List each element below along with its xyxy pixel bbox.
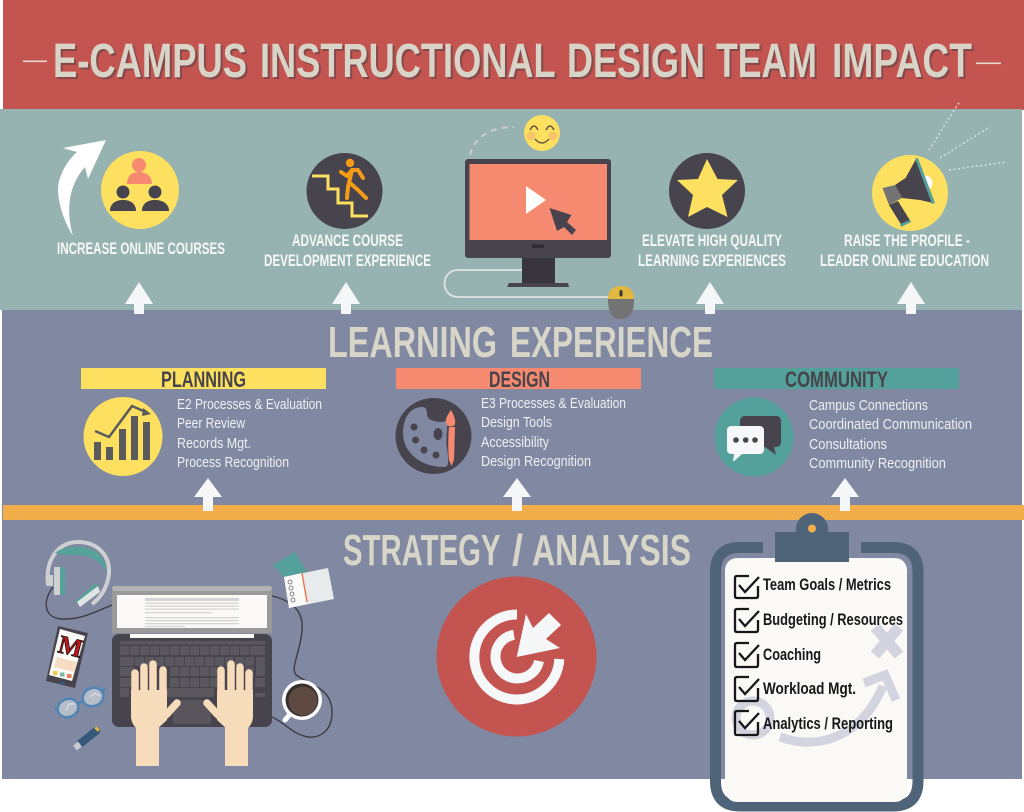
checkbox icons <box>735 576 759 735</box>
list: design items: Accessibility <box>481 434 549 451</box>
checklist text: Coaching <box>763 645 821 664</box>
list: design items: Design Recognition <box>481 453 591 470</box>
panel: community <box>714 367 972 476</box>
panel: design: DESIGN <box>489 367 550 392</box>
list: community items: Consultations <box>809 436 887 453</box>
list: planning items <box>177 396 322 471</box>
list: planning items: E2 Processes & Evaluation <box>177 396 322 413</box>
label: increase online courses: INCREASE ONLINE COURSES <box>57 240 225 258</box>
list: community items: Community Recognition <box>809 455 946 472</box>
clip <box>775 513 849 562</box>
panel: impact outcomes <box>0 109 1022 310</box>
list: planning items: Peer Review <box>177 415 245 432</box>
heading: strategy / analysis: ANALYSIS <box>532 526 691 575</box>
panel: community: COMMUNITY <box>785 367 888 392</box>
panel: planning <box>81 367 326 476</box>
label: elevate high quality learning experiences: ELEVATE HIGH QUALITY <box>642 232 782 250</box>
title: INSTRUCTIONAL <box>260 35 555 88</box>
headphones <box>47 542 109 607</box>
arrows: upward from strategy <box>194 478 859 511</box>
heading: strategy / analysis: / <box>512 526 523 575</box>
title: DESIGN <box>567 35 705 88</box>
checklist text: Team Goals / Metrics <box>763 575 891 594</box>
icon: megaphone <box>872 101 1007 231</box>
usb stick <box>75 728 98 748</box>
laptop <box>112 586 272 727</box>
label: advance course development experience: DEVELOPMENT EXPERIENCE <box>264 252 431 270</box>
icon: palette <box>396 398 472 474</box>
illustration: desk with laptop <box>46 542 334 766</box>
arrows: upward from learning experience <box>125 282 925 314</box>
list: planning items: Records Mgt. <box>177 435 251 452</box>
list: design items: E3 Processes & Evaluation <box>481 395 626 412</box>
icon: monitor with video <box>444 159 611 297</box>
icon: target with arrow <box>436 576 596 736</box>
glasses <box>55 685 106 720</box>
phone with M logo <box>46 626 88 688</box>
heading: learning experience: EXPERIENCE <box>510 318 713 367</box>
label: raise the profile <box>820 232 989 270</box>
watermark: play diagram <box>736 627 899 742</box>
panel: design <box>396 367 641 474</box>
list: design items: Design Tools <box>481 414 552 431</box>
list: community items <box>809 397 972 472</box>
list: design items <box>481 395 626 470</box>
title banner <box>3 0 1024 110</box>
label: elevate high quality learning experiences <box>638 232 786 270</box>
icon: chat bubbles <box>714 398 794 476</box>
title: TEAM <box>716 35 817 88</box>
label: advance course development experience <box>264 232 431 270</box>
hands <box>131 664 253 766</box>
heading: strategy / analysis: STRATEGY <box>343 526 500 575</box>
heading: learning experience: LEARNING <box>328 318 497 367</box>
title: IMPACT <box>832 35 972 88</box>
clipboard frame <box>716 548 918 806</box>
label: advance course development experience: ADVANCE COURSE <box>292 232 403 250</box>
list: planning items: Process Recognition <box>177 454 289 471</box>
list: community items: Coordinated Communication <box>809 416 972 433</box>
icon: star <box>669 153 745 229</box>
panel: planning: PLANNING <box>161 367 246 392</box>
cords <box>46 587 332 737</box>
icon: smiley <box>470 115 560 155</box>
phone with M logo: M <box>55 630 86 664</box>
panel: learning experience and strategy background <box>2 310 1022 779</box>
label: elevate high quality learning experiences: LEARNING EXPERIENCES <box>638 252 786 270</box>
paper <box>725 558 907 802</box>
title: E-CAMPUS <box>53 35 247 88</box>
label: raise the profile: RAISE THE PROFILE - <box>844 232 970 250</box>
checklist text <box>763 575 903 733</box>
divider band <box>3 505 1024 520</box>
checklist text: Budgeting / Resources <box>763 610 903 629</box>
icon: growth arrow <box>58 140 106 236</box>
checklist text: Workload Mgt. <box>763 679 856 698</box>
notebook <box>273 552 334 608</box>
clipboard checklist <box>716 513 918 806</box>
list: community items: Campus Connections <box>809 397 928 414</box>
icon: bar chart <box>84 397 162 476</box>
icon: people <box>101 151 179 229</box>
icon: stairs runner <box>306 153 382 229</box>
checklist text: Analytics / Reporting <box>763 714 893 733</box>
icon: mouse <box>608 286 634 319</box>
coffee cup <box>282 680 322 720</box>
